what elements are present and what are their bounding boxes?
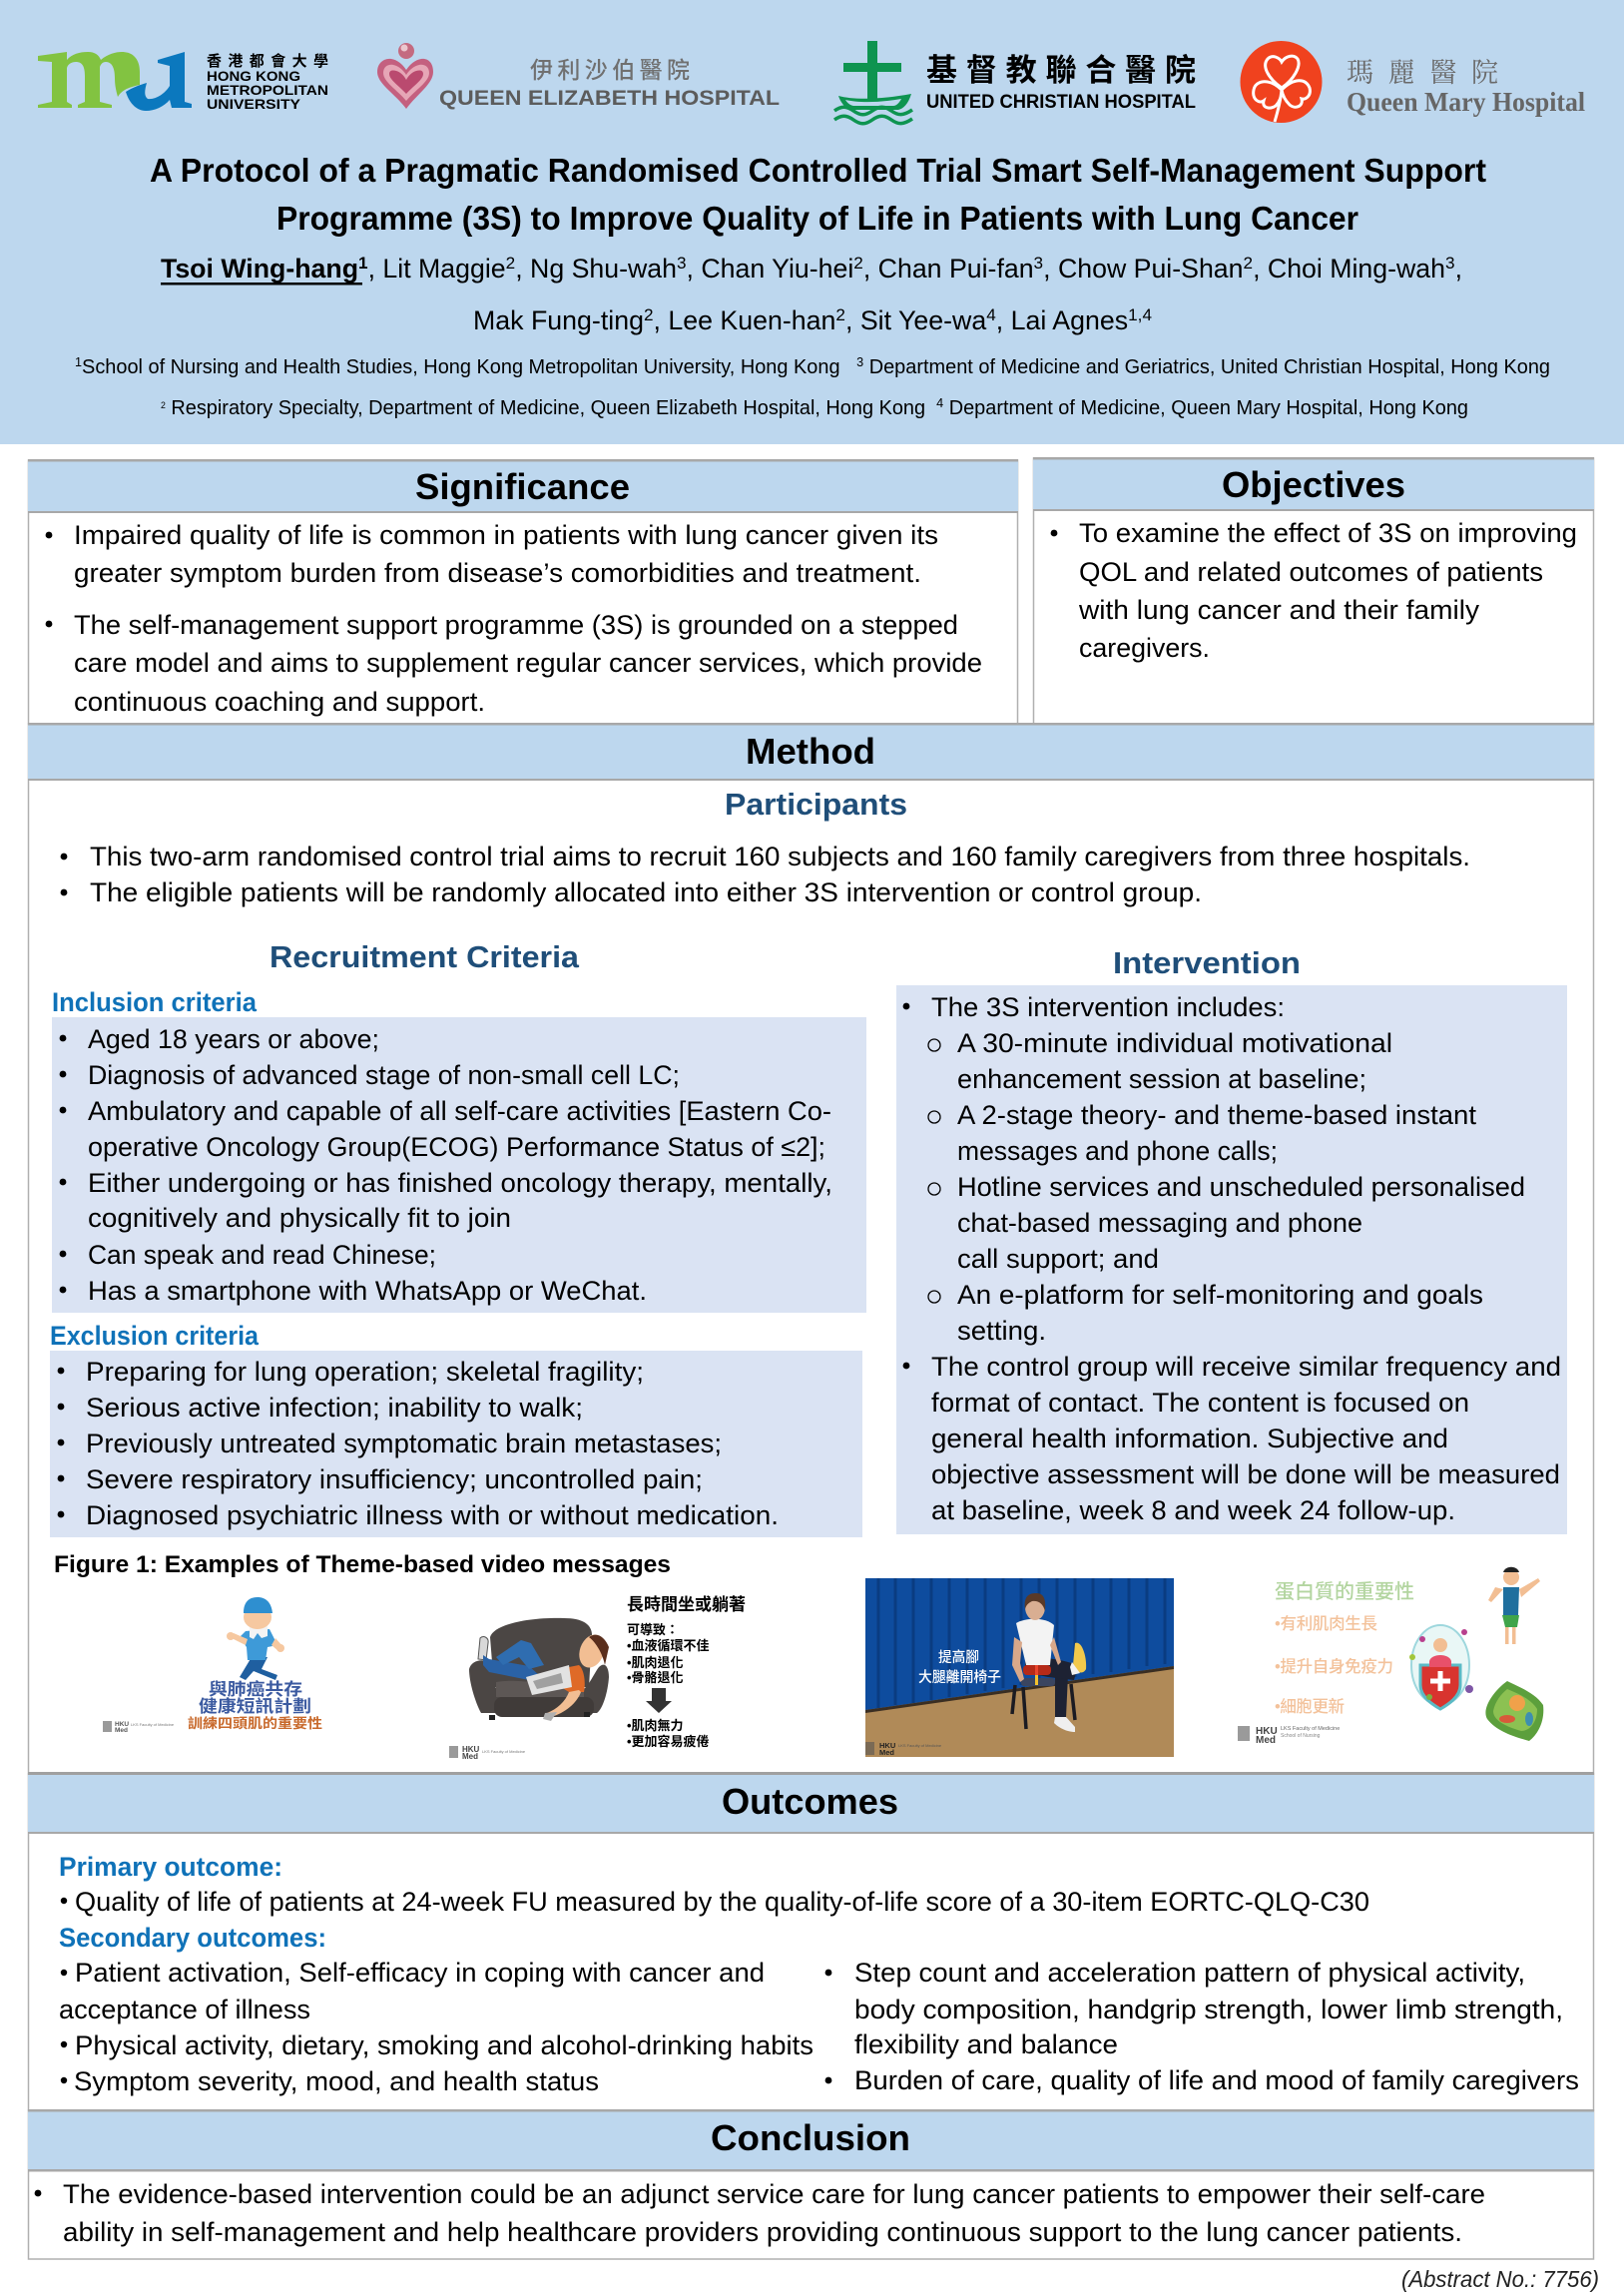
- abstract number note: (Abstract No.: 7756): [1401, 2266, 1599, 2292]
- panel: intervention list: chat-based messaging and phone: [957, 1208, 1362, 1238]
- figure: video message 2, sitting too long: •血液循環不佳: [627, 1638, 710, 1653]
- figure: video message 1, runner: 健康短訊計劃: [199, 1696, 311, 1716]
- heading: objectives: Objectives: [1222, 464, 1405, 505]
- figure: video message 4, protein: 蛋白質的重要性: [1275, 1580, 1414, 1603]
- panel: exclusion criteria list: Diagnosed psychiatric illness with or without medication.: [86, 1500, 779, 1530]
- figure: video message 4, protein: •細胞更新: [1275, 1697, 1345, 1716]
- title: Programme (3S) to Improve Quality of Life in Patients with Lung Cancer: [276, 200, 1358, 237]
- title: [150, 152, 1486, 237]
- authors: , Lai Agnes: [996, 305, 1128, 335]
- heading: objectives: [1033, 457, 1594, 511]
- authors: 2: [853, 254, 863, 273]
- authors: 2: [506, 254, 515, 273]
- panel: intervention list: [896, 985, 1567, 1534]
- affiliations: Respiratory Specialty, Department of Medicine, Queen Elizabeth Hospital, Hong Kong: [166, 396, 936, 419]
- authors: [161, 254, 1462, 335]
- text block: significance bullets: The self-management support programme (3S) is grounded on a stepped: [74, 610, 958, 640]
- text block: objectives bullet: with lung cancer and their family: [1078, 595, 1480, 625]
- panel: intervention list: Hotline services and unscheduled personalised: [957, 1172, 1525, 1202]
- panel: intervention list: The control group will receive similar frequency and: [931, 1352, 1561, 1382]
- figure: video message 3, exercise photo: [865, 1578, 1174, 1757]
- affiliations: School of Nursing and Health Studies, Hong Kong Metropolitan University, Hong Kong: [82, 355, 856, 378]
- logo: Hong Kong Metropolitan University: [38, 52, 328, 112]
- panel: inclusion criteria list: [52, 1017, 866, 1313]
- authors: 2: [1244, 254, 1253, 273]
- panel: intervention list: A 30-minute individual motivational: [957, 1028, 1392, 1058]
- figure: video message 2, sitting too long: HKU: [462, 1745, 480, 1754]
- panel: intervention list: objective assessment will be done will be measured: [931, 1459, 1560, 1489]
- text block: secondary outcomes left: Symptom severity, mood, and health status: [74, 2066, 599, 2096]
- text block: secondary outcomes right: flexibility and balance: [854, 2029, 1118, 2059]
- figure: video message 4, protein: •提升自身免疫力: [1275, 1657, 1393, 1676]
- text block: significance bullets: greater symptom burden from disease’s comorbidities and treatment.: [74, 558, 921, 588]
- figure: video message 4, protein: HKU: [1256, 1726, 1278, 1737]
- panel: significance: [28, 459, 1018, 724]
- panel: intervention list: A 2-stage theory- and theme-based instant: [957, 1100, 1477, 1130]
- text block: primary outcome bullet: Quality of life of patients at 24-week FU measured by the quality-of-life score of a 30-item EORTC-QLQ-C30: [75, 1887, 1369, 1917]
- text block: secondary outcomes left: [59, 1958, 813, 2096]
- logo: Queen Mary Hospital: [1240, 41, 1585, 123]
- authors: , Sit Yee-wa: [845, 305, 986, 335]
- figure: video message 2, sitting too long: •更加容易疲倦: [627, 1734, 710, 1749]
- figure: video message 4, protein: LKS Faculty of Medicine: [1281, 1726, 1340, 1732]
- affiliations: 2: [161, 400, 166, 410]
- logo: United Christian Hospital: 基督教聯合醫院: [926, 53, 1196, 88]
- figure: video message 3, exercise photo: 提高腳: [938, 1649, 979, 1666]
- text block: secondary outcomes left: Physical activity, dietary, smoking and alcohol-drinking habits: [75, 2030, 813, 2060]
- panel: exclusion criteria list: Preparing for lung operation; skeletal fragility;: [86, 1357, 644, 1387]
- figure: video message 2, sitting too long: [449, 1594, 746, 1761]
- figure: video message 3, exercise photo: HKU: [879, 1741, 895, 1750]
- text block: objectives bullet: [1051, 518, 1577, 663]
- authors: 2: [835, 305, 845, 324]
- subheading: secondary outcomes: Secondary outcomes:: [59, 1923, 326, 1953]
- panel: exclusion criteria list: Severe respiratory insufficiency; uncontrolled pain;: [86, 1464, 703, 1494]
- logo: Queen Mary Hospital: 瑪麗醫院: [1347, 58, 1498, 88]
- affiliations: 3: [856, 354, 863, 369]
- subheading: recruitment criteria: Recruitment Criteria: [270, 939, 580, 974]
- figure: video message 2, sitting too long: LKS Faculty of Medicine: [482, 1749, 526, 1754]
- subheading: inclusion criteria: Inclusion criteria: [52, 987, 258, 1017]
- panel: intervention list: enhancement session at baseline;: [957, 1064, 1366, 1094]
- text block: secondary outcomes right: Step count and acceleration pattern of physical activity,: [854, 1958, 1525, 1988]
- logo: Hong Kong Metropolitan University: METROPOLITAN: [207, 82, 328, 98]
- authors: 1,4: [1128, 305, 1152, 324]
- text block: conclusion: The evidence-based intervention could be an adjunct service care for lung cancer patients to empower their self-care: [63, 2179, 1485, 2209]
- panel: inclusion criteria list: Diagnosis of advanced stage of non-small cell LC;: [88, 1060, 680, 1090]
- text block: participants bullets: [61, 842, 1470, 907]
- figure: video message 1, runner: LKS Faculty of Medicine: [131, 1722, 175, 1727]
- figure: video message 1, runner: HKU: [115, 1721, 129, 1728]
- figure: video message 2, sitting too long: •骨骼退化: [627, 1670, 684, 1685]
- text block: conclusion: [35, 2179, 1485, 2247]
- subheading: participants: Participants: [725, 787, 907, 822]
- figure: video message 3, exercise photo: Med: [879, 1748, 894, 1757]
- figure: video message 2, sitting too long: 可導致：: [627, 1622, 679, 1637]
- logo: Queen Elizabeth Hospital: [377, 43, 780, 110]
- panel: intervention list: at baseline, week 8 and week 24 follow-up.: [931, 1495, 1455, 1525]
- panel: exclusion criteria list: Serious active infection; inability to walk;: [86, 1393, 583, 1423]
- logo: Queen Elizabeth Hospital: 伊利沙伯醫院: [530, 57, 690, 83]
- panel: intervention list: call support; and: [957, 1244, 1159, 1274]
- authors: Tsoi Wing-hang: [161, 254, 358, 284]
- header banner: [0, 0, 1624, 444]
- panel: conclusion: [28, 2109, 1594, 2259]
- authors: , Chow Pui-Shan: [1043, 254, 1244, 284]
- figure: video message 2, sitting too long: •肌肉退化: [627, 1655, 684, 1670]
- authors: , Chan Yiu-hei: [687, 254, 853, 284]
- text block: participants bullets: The eligible patients will be randomly allocated into either 3S intervention or control group.: [90, 877, 1202, 907]
- panel: inclusion criteria list: Ambulatory and capable of all self-care activities [Eastern Co-: [88, 1096, 831, 1126]
- authors: 3: [1445, 254, 1455, 273]
- panel: intervention list: An e-platform for self-monitoring and goals: [957, 1280, 1483, 1310]
- authors: , Ng Shu-wah: [515, 254, 677, 284]
- subheading: intervention: Intervention: [1113, 945, 1301, 980]
- authors: Mak Fung-ting: [473, 305, 642, 335]
- panel: exclusion criteria list: [50, 1351, 862, 1537]
- heading: conclusion: Conclusion: [711, 2117, 910, 2158]
- panel: intervention list: messages and phone calls;: [957, 1136, 1278, 1166]
- text block: significance bullets: care model and aims to supplement regular cancer services, which provide: [74, 648, 982, 678]
- logo: Queen Elizabeth Hospital: QUEEN ELIZABETH HOSPITAL: [439, 86, 780, 110]
- heading: outcomes: Outcomes: [722, 1781, 898, 1822]
- authors: , Lee Kuen-han: [654, 305, 835, 335]
- text block: secondary outcomes right: [825, 1958, 1579, 2095]
- panel: inclusion criteria list: Can speak and read Chinese;: [88, 1240, 436, 1270]
- subheading: primary outcome: Primary outcome:: [59, 1852, 282, 1882]
- figure: video message 2, sitting too long: 長時間坐或躺著: [627, 1594, 746, 1614]
- authors: 4: [986, 305, 996, 324]
- authors: , Lit Maggie: [368, 254, 506, 284]
- panel: intervention list: setting.: [957, 1316, 1046, 1346]
- affiliations: Department of Medicine and Geriatrics, United Christian Hospital, Hong Kong: [863, 355, 1550, 378]
- figure: video message 4, protein: Med: [1256, 1735, 1276, 1746]
- authors: 1: [358, 254, 368, 273]
- text block: objectives bullet: caregivers.: [1079, 633, 1210, 663]
- panel: inclusion criteria list: Has a smartphone with WhatsApp or WeChat.: [88, 1276, 647, 1306]
- authors: 3: [677, 254, 687, 273]
- figure: video message 2, sitting too long: Med: [462, 1752, 478, 1761]
- text block: objectives bullet: QOL and related outcomes of patients: [1079, 557, 1543, 587]
- figure: video message 1, runner: 訓練四頭肌的重要性: [188, 1715, 323, 1731]
- text block: significance bullets: Impaired quality of life is common in patients with lung cancer given its: [74, 520, 938, 550]
- panel: intervention list: general health information. Subjective and: [931, 1424, 1448, 1453]
- heading: method: Method: [746, 731, 875, 772]
- text block: secondary outcomes left: acceptance of illness: [59, 1995, 310, 2024]
- panel: intervention list: The 3S intervention includes:: [931, 992, 1285, 1022]
- authors: ,: [1455, 254, 1462, 284]
- text block: significance bullets: [46, 520, 982, 717]
- text block: conclusion: ability in self-management and help healthcare providers providing continuous support to the lung cancer patients.: [63, 2217, 1462, 2247]
- subheading: exclusion criteria: Exclusion criteria: [50, 1321, 260, 1351]
- figure: video message 1, runner: 與肺癌共存: [209, 1679, 302, 1699]
- text block: participants bullets: This two-arm randomised control trial aims to recruit 160 subjects and 160 family caregivers from three hospitals.: [90, 842, 1470, 871]
- logo: Hong Kong Metropolitan University: HONG KONG: [207, 68, 300, 84]
- panel: inclusion criteria list: cognitively and physically fit to join: [88, 1203, 511, 1233]
- authors: , Chan Pui-fan: [863, 254, 1034, 284]
- panel: objectives: [1033, 457, 1594, 724]
- text block: significance bullets: continuous coaching and support.: [74, 687, 485, 717]
- figure: video message 4, protein: •有利肌肉生長: [1275, 1614, 1377, 1633]
- panel: inclusion criteria list: Either undergoing or has finished oncology therapy, mentally,: [88, 1168, 832, 1198]
- affiliations: 4: [936, 395, 943, 410]
- panel: method: [28, 723, 1594, 1774]
- figure: video message 1, runner: Med: [115, 1727, 128, 1734]
- logo: United Christian Hospital: [834, 41, 1196, 124]
- figure: video message 2, sitting too long: •肌肉無力: [627, 1718, 684, 1733]
- authors: , Choi Ming-wah: [1253, 254, 1445, 284]
- authors: 3: [1034, 254, 1043, 273]
- figure: video message 1, runner: [103, 1597, 323, 1734]
- heading: outcomes: [28, 1772, 1594, 1834]
- heading: significance: [28, 459, 1018, 513]
- panel: exclusion criteria list: Previously untreated symptomatic brain metastases;: [86, 1429, 722, 1458]
- heading: significance: Significance: [415, 466, 630, 507]
- logo: Hong Kong Metropolitan University: 香港都會大學: [207, 52, 328, 70]
- affiliations: 1: [75, 354, 82, 369]
- text block: objectives bullet: To examine the effect of 3S on improving: [1079, 518, 1577, 548]
- figure caption: Figure 1: Examples of Theme-based video messages: [54, 1551, 671, 1578]
- text block: secondary outcomes right: body composition, handgrip strength, lower limb strength,: [854, 1995, 1563, 2024]
- panel: inclusion criteria list: operative Oncology Group(ECOG) Performance Status of ≤2];: [88, 1132, 825, 1162]
- affiliations: [75, 354, 1550, 419]
- text block: secondary outcomes right: Burden of care, quality of life and mood of family caregivers: [854, 2065, 1579, 2095]
- logo: Hong Kong Metropolitan University: UNIVERSITY: [207, 96, 301, 112]
- figure: video message 4, protein: [1238, 1567, 1543, 1746]
- panel: intervention list: format of contact. The content is focused on: [931, 1388, 1469, 1418]
- text block: secondary outcomes left: Patient activation, Self-efficacy in coping with cancer and: [75, 1958, 765, 1988]
- panel: inclusion criteria list: Aged 18 years or above;: [88, 1024, 379, 1054]
- panel: outcomes: [28, 1772, 1594, 2110]
- logo: Queen Mary Hospital: Queen Mary Hospital: [1347, 87, 1585, 117]
- figure: video message 3, exercise photo: LKS Faculty of Medicine: [898, 1743, 942, 1748]
- affiliations: Department of Medicine, Queen Mary Hospital, Hong Kong: [943, 396, 1468, 419]
- logo: United Christian Hospital: UNITED CHRISTIAN HOSPITAL: [926, 92, 1196, 113]
- title: A Protocol of a Pragmatic Randomised Controlled Trial Smart Self-Management Support: [150, 152, 1486, 189]
- figure: video message 4, protein: School of Nursing: [1281, 1733, 1321, 1739]
- heading: conclusion: [28, 2109, 1594, 2172]
- heading: method: [28, 723, 1594, 781]
- authors: 2: [644, 305, 654, 324]
- figure: video message 3, exercise photo: 大腿離開椅子: [918, 1668, 1001, 1686]
